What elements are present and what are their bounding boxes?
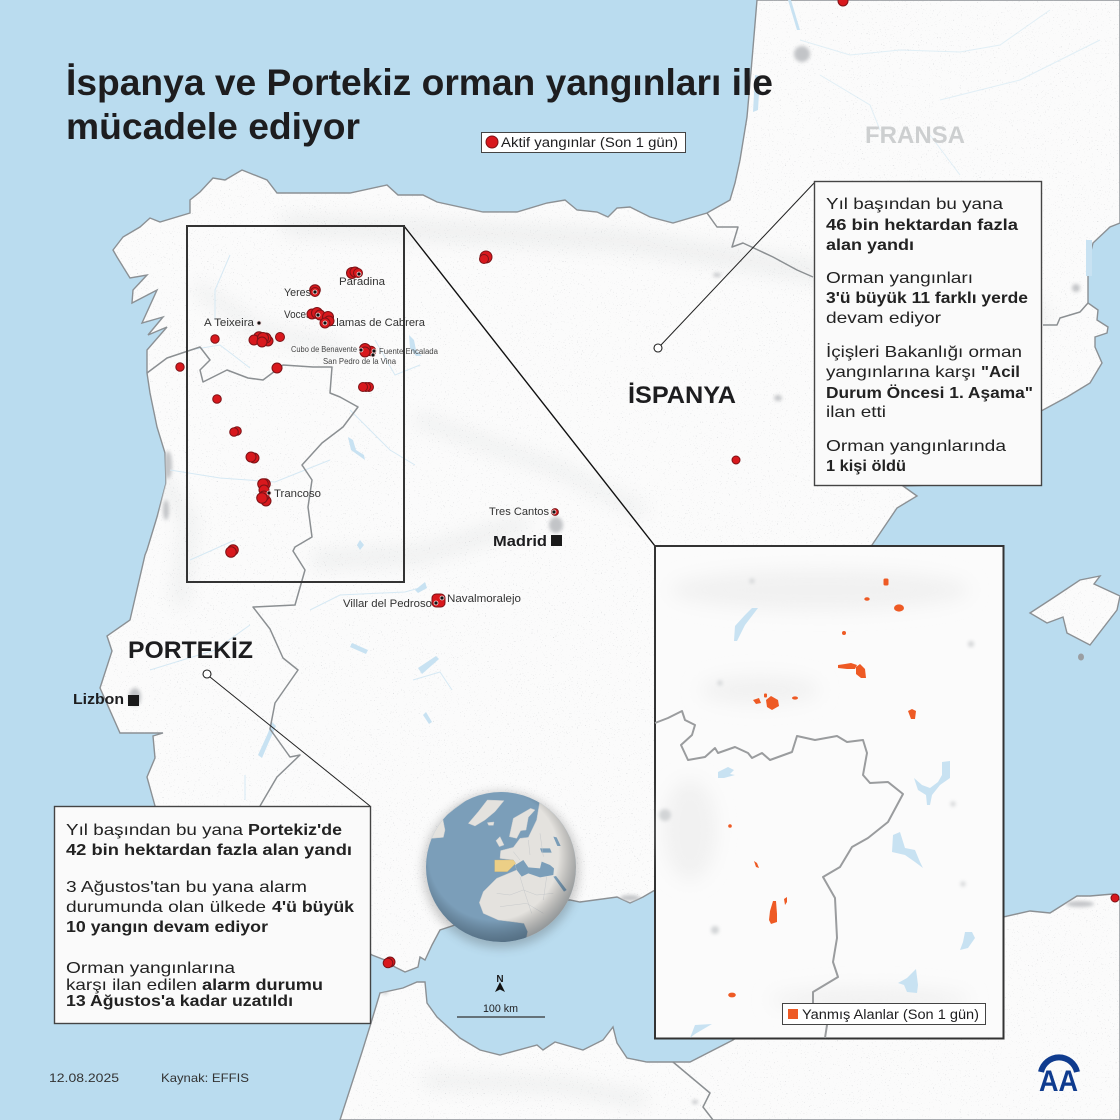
legend: active fires bbox=[482, 132, 686, 152]
footer source: Kaynak: EFFIS bbox=[161, 1071, 249, 1085]
title: İspanya ve Portekiz orman yangınları ile bbox=[66, 62, 773, 103]
legend: active fires: Aktif yangınlar (Son 1 gün) bbox=[501, 135, 678, 150]
place labels: Llamas de Cabrera bbox=[330, 317, 426, 329]
land: Mallorca bbox=[1030, 576, 1120, 645]
place labels: Fuente Encalada bbox=[379, 347, 439, 356]
title: mücadele ediyor bbox=[66, 106, 360, 147]
place labels: Trancoso bbox=[274, 488, 321, 500]
inset lakes bbox=[690, 608, 975, 1038]
place labels: Paradina bbox=[339, 276, 386, 288]
inset hill shading bbox=[664, 570, 970, 1012]
north arrow: N bbox=[496, 974, 504, 985]
place labels: Voces bbox=[284, 309, 311, 321]
globe locator bbox=[420, 790, 587, 948]
country label: Portekiz: PORTEKİZ bbox=[128, 637, 253, 664]
panel: Spain facts: Orman yangınları bbox=[826, 270, 973, 287]
panel: Spain facts: yangınlarına karşı bbox=[826, 364, 976, 381]
panel: Portugal facts: 10 yangın devam ediyor bbox=[66, 919, 268, 936]
Portugal–Spain border bbox=[147, 347, 358, 806]
land: North Africa bbox=[340, 894, 1120, 1120]
title bbox=[66, 62, 773, 147]
scale bar bbox=[457, 1003, 545, 1017]
inset grey settlements bbox=[659, 578, 974, 934]
burned area polygons bbox=[728, 578, 916, 997]
panel: Spain facts: 1 kişi öldü bbox=[826, 458, 906, 475]
panel: Spain facts: alan yandı bbox=[826, 237, 914, 254]
footer date: 12.08.2025 bbox=[49, 1071, 119, 1085]
borders bbox=[147, 213, 1088, 1120]
capital: Lizbon: Lizbon bbox=[73, 691, 124, 708]
panel: Portugal facts bbox=[54, 806, 370, 1024]
active fire markers bbox=[176, 0, 1119, 968]
place labels: Yeres bbox=[284, 287, 311, 299]
panel: Spain facts: "Acil bbox=[981, 364, 1020, 381]
place labels: Villar del Pedroso bbox=[343, 598, 432, 610]
rivers and lakes bbox=[150, 0, 1100, 800]
panel: Portugal facts: alarm durumu bbox=[202, 977, 323, 994]
logo: AA: AA bbox=[1039, 1065, 1078, 1098]
panel: Spain facts: devam ediyor bbox=[826, 310, 942, 327]
land: Cabrera islet bbox=[1078, 654, 1084, 660]
panel: Spain facts bbox=[814, 182, 1042, 486]
panel: Portugal facts: Portekiz'de bbox=[248, 822, 342, 839]
inset border bbox=[655, 711, 903, 1038]
panel: Spain facts: Durum Öncesi 1. Aşama" bbox=[826, 383, 1033, 402]
panel: selected-area frame bbox=[187, 226, 404, 582]
panel: Portugal facts: Yıl başından bu yana bbox=[66, 822, 243, 839]
panel: Spain facts: 46 bin hektardan fazla bbox=[826, 217, 1018, 234]
panel: Portugal facts: 13 Ağustos'a kadar uzatıldı bbox=[66, 993, 293, 1010]
place markers bbox=[257, 272, 556, 605]
panel: Spain facts: Orman yangınlarında bbox=[826, 438, 1006, 455]
panel: Spain facts: 3'ü büyük 11 farklı yerde bbox=[826, 290, 1028, 307]
legend: burned areas bbox=[782, 1004, 986, 1024]
callout leader: Portugal bbox=[203, 670, 370, 806]
country label: Fransa: FRANSA bbox=[865, 122, 965, 149]
connector line between insets bbox=[404, 226, 655, 546]
land: Iberia and France bbox=[100, 0, 1120, 972]
place labels: Cubo de Benavente bbox=[291, 345, 358, 354]
panel: Portugal facts: Orman yangınlarına bbox=[66, 960, 235, 977]
panel: Portugal facts: 42 bin hektardan fazla alan yandı bbox=[66, 842, 352, 859]
panel: Spain facts: İçişleri Bakanlığı orman bbox=[826, 342, 1022, 361]
capital: Madrid: Madrid bbox=[493, 533, 547, 550]
panel: Portugal facts: durumunda olan ülkede bbox=[66, 899, 266, 916]
panel: Spain facts: Yıl başından bu yana bbox=[826, 196, 1003, 213]
north arrow bbox=[495, 974, 505, 992]
scale bar: 100 km bbox=[483, 1003, 518, 1015]
legend: burned areas: Yanmış Alanlar (Son 1 gün) bbox=[802, 1007, 979, 1022]
panel: Portugal facts: 3 Ağustos'tan bu yana alarm bbox=[66, 879, 307, 896]
place labels bbox=[204, 276, 549, 610]
place labels: A Teixeira bbox=[204, 317, 255, 329]
place labels: San Pedro de la Vina bbox=[323, 357, 397, 366]
panel: Portugal facts: 4'ü büyük bbox=[272, 899, 354, 916]
country label: İspanya: İSPANYA bbox=[628, 382, 736, 409]
panel: Portugal facts: karşı ilan edilen bbox=[66, 977, 197, 994]
callout leader: Spain bbox=[654, 182, 815, 352]
place labels: Tres Cantos bbox=[489, 506, 549, 518]
panel: Spain facts: ilan etti bbox=[826, 404, 886, 421]
panel: burned areas inset bbox=[655, 546, 1004, 1038]
place labels: Navalmoralejo bbox=[447, 593, 521, 605]
